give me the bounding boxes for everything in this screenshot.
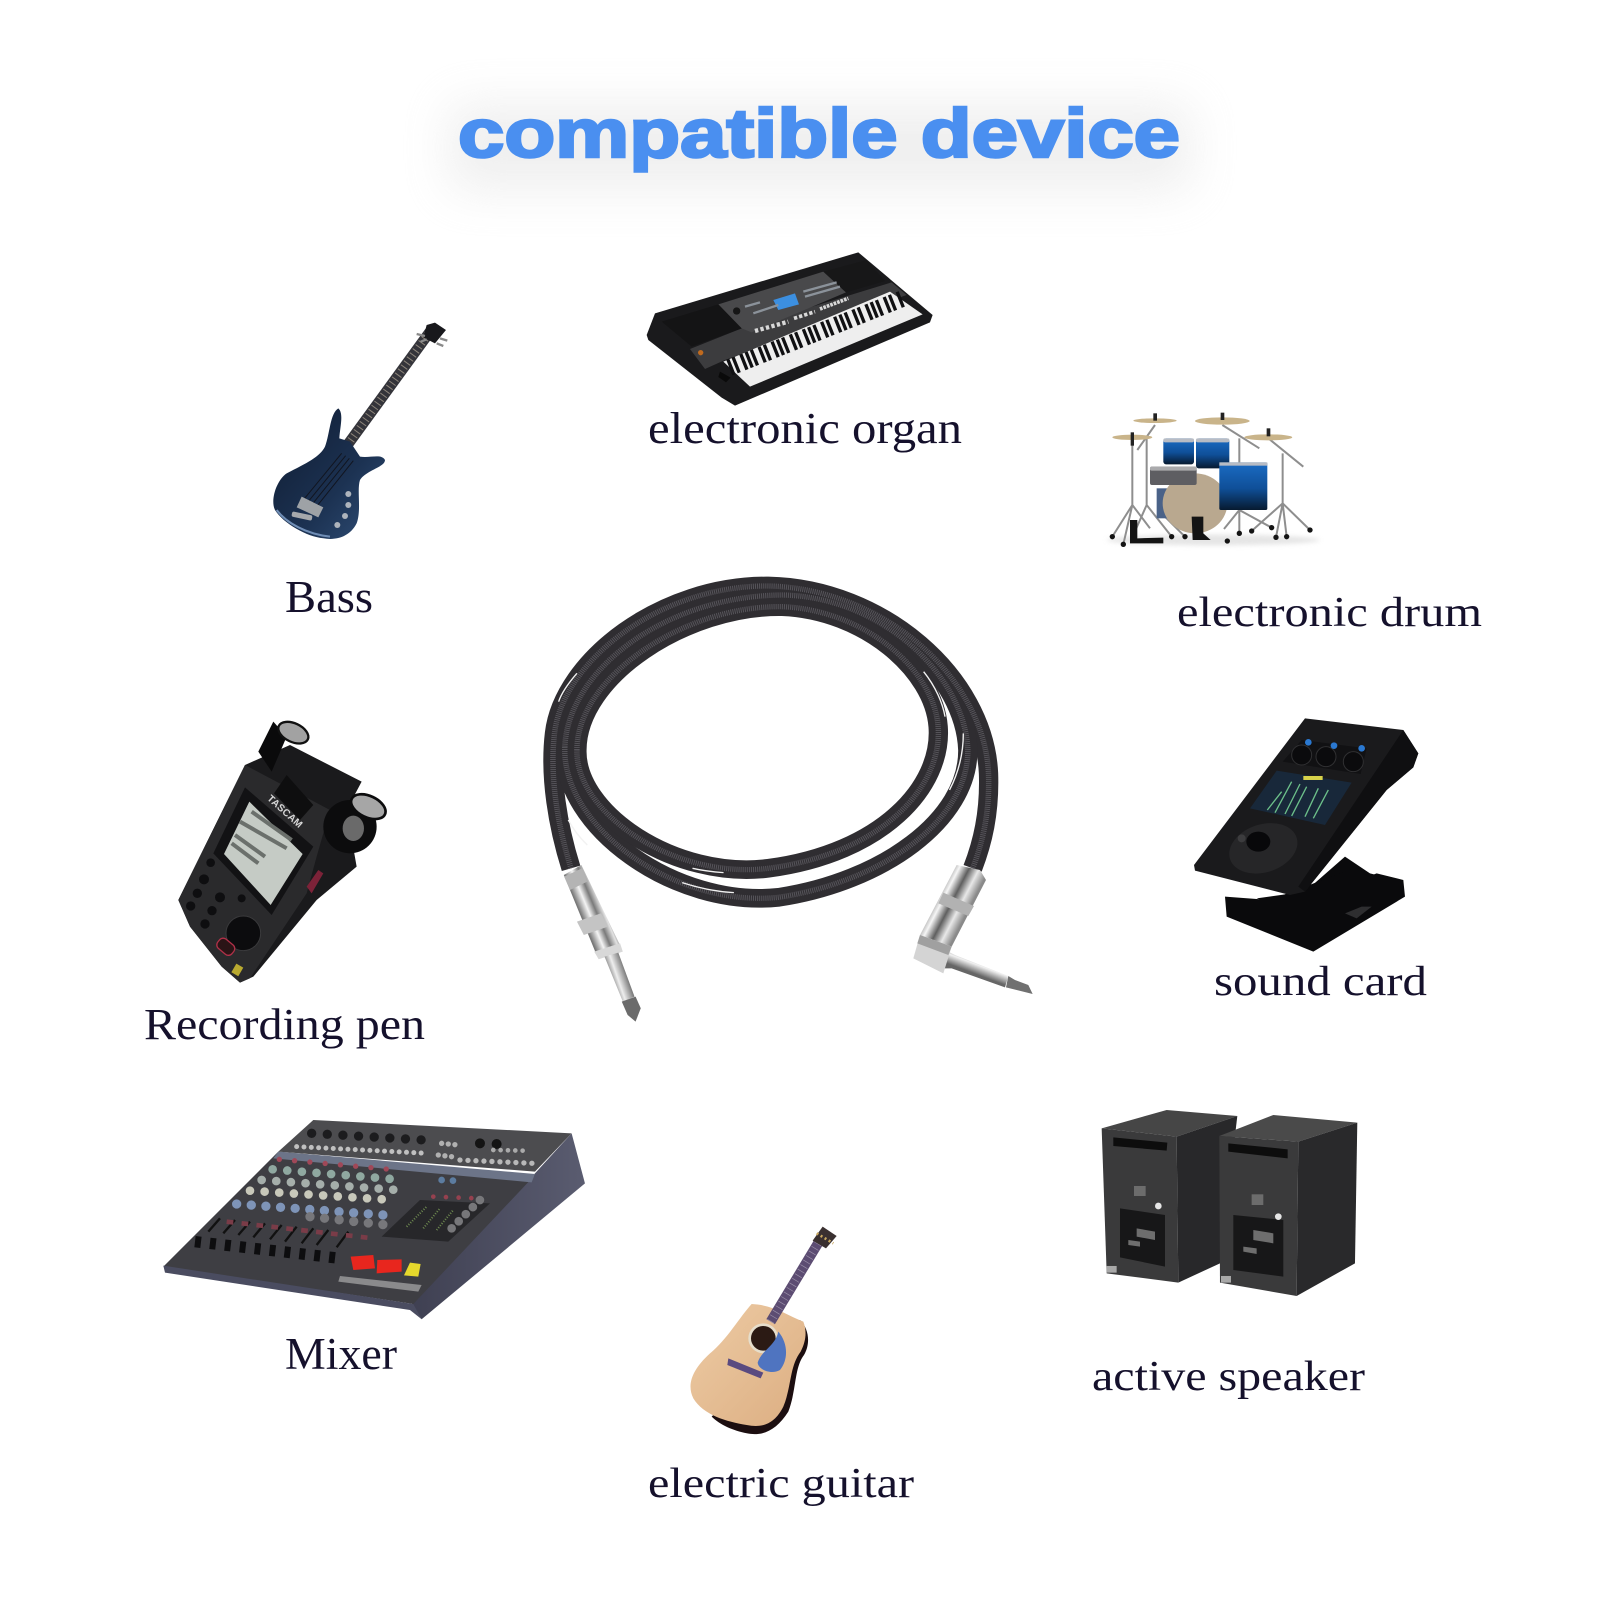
organ display buttons — [745, 282, 848, 331]
blue floor leg — [1157, 488, 1168, 518]
drum stands — [1112, 425, 1310, 544]
mixer front edge — [163, 1266, 422, 1319]
bass drum — [1163, 473, 1227, 533]
label: active speaker: active speaker — [1092, 1354, 1365, 1400]
sound card body — [1194, 718, 1418, 895]
organ body — [647, 252, 933, 406]
recorder record button — [215, 936, 237, 957]
icon: bass guitar — [273, 323, 447, 539]
recorder side microphone — [323, 789, 389, 853]
title — [450, 95, 1190, 190]
cable with two plugs — [553, 586, 1033, 1022]
pedals and feet — [1110, 517, 1313, 547]
mixer meter section — [382, 1200, 490, 1242]
bass bridge — [297, 497, 323, 517]
mixer knob rows — [237, 1159, 407, 1225]
sound card knobs — [1292, 745, 1363, 772]
mixer rear connector panel — [278, 1120, 572, 1172]
icon: electric guitar — [691, 1227, 837, 1434]
cymbals — [1112, 417, 1292, 440]
organ screen — [773, 293, 799, 310]
mixer yellow fader — [404, 1263, 421, 1277]
title: compatible device — [458, 95, 1180, 172]
rack tom left — [1163, 438, 1194, 464]
cable loops — [553, 586, 989, 898]
bass pickup — [291, 511, 313, 521]
right angled plug — [913, 865, 1033, 994]
organ speaker left — [662, 304, 742, 347]
mixer red faders — [351, 1255, 402, 1273]
rack tom right — [1196, 438, 1229, 468]
cymbal nuts — [1131, 413, 1270, 446]
sound card side — [1298, 730, 1418, 892]
bass body — [273, 408, 385, 539]
recorder face — [178, 765, 330, 983]
mixer divider stripe — [273, 1152, 535, 1182]
guitar headstock — [813, 1227, 837, 1248]
label: Mixer: Mixer — [285, 1329, 397, 1379]
gaps between cable strands — [559, 672, 963, 893]
sound card knob plate — [1283, 740, 1367, 774]
sound card slide switch — [1345, 907, 1372, 918]
snare — [1150, 467, 1197, 485]
recorder sticker — [231, 964, 243, 976]
icon: recording pen — [178, 717, 389, 983]
drum floor shadow — [1107, 535, 1320, 545]
label: Recording pen: Recording pen — [144, 1000, 425, 1049]
label: sound card: sound card — [1214, 959, 1427, 1005]
recorder top microphone — [258, 717, 312, 772]
organ keybed — [723, 292, 923, 387]
recorder wheel — [226, 916, 261, 951]
mixer deck — [163, 1152, 535, 1304]
label: electronic drum: electronic drum — [1177, 590, 1482, 636]
guitar neck — [771, 1240, 820, 1322]
recorder brand: TASCAM — [265, 793, 304, 831]
bass body edge highlight — [277, 510, 330, 537]
organ speaker right — [823, 260, 885, 292]
recorder side switch — [307, 870, 323, 893]
right speaker — [1219, 1115, 1357, 1296]
recorder body — [178, 745, 362, 983]
mixer faders — [195, 1218, 373, 1258]
organ knob — [733, 307, 740, 315]
mixer master knobs — [433, 1180, 483, 1228]
icon: electronic organ — [647, 252, 933, 406]
bass neck — [345, 332, 430, 448]
bass knobs — [334, 491, 351, 528]
sound card blue buttons — [1305, 739, 1365, 752]
sound card base — [1225, 867, 1405, 952]
organ slider — [718, 372, 731, 382]
organ deck strip — [690, 282, 907, 369]
sound card stand — [1257, 857, 1390, 923]
guitar pickguard — [758, 1332, 786, 1372]
bass headstock — [417, 323, 447, 346]
sound card wheel — [1223, 815, 1304, 882]
recorder speaker grille — [274, 775, 313, 820]
organ power light — [698, 350, 703, 355]
left straight plug — [564, 865, 641, 1022]
recorder buttons — [186, 858, 246, 929]
label: electric guitar: electric guitar — [648, 1461, 914, 1507]
mixer connectors — [297, 1133, 533, 1163]
label: electronic organ: electronic organ — [648, 404, 962, 453]
floor tom — [1219, 462, 1267, 510]
guitar top — [691, 1304, 806, 1426]
sound card screen — [1250, 771, 1352, 825]
label: Bass: Bass — [285, 572, 373, 622]
icon: electronic drum — [1107, 413, 1320, 547]
icon: mixer — [163, 1120, 585, 1319]
recorder screen frame — [213, 787, 313, 915]
mixer bottom labels — [338, 1276, 422, 1292]
icon: sound card — [1194, 718, 1418, 952]
left speaker — [1102, 1110, 1237, 1283]
guitar bridge — [727, 1358, 763, 1378]
mixer side panel — [412, 1133, 585, 1319]
bass strings — [303, 453, 353, 507]
recorder LCD — [224, 802, 303, 905]
organ control panel — [718, 272, 846, 332]
guitar side — [712, 1320, 808, 1434]
icon: active speakers — [1102, 1110, 1357, 1296]
guitar sound hole — [748, 1323, 778, 1353]
